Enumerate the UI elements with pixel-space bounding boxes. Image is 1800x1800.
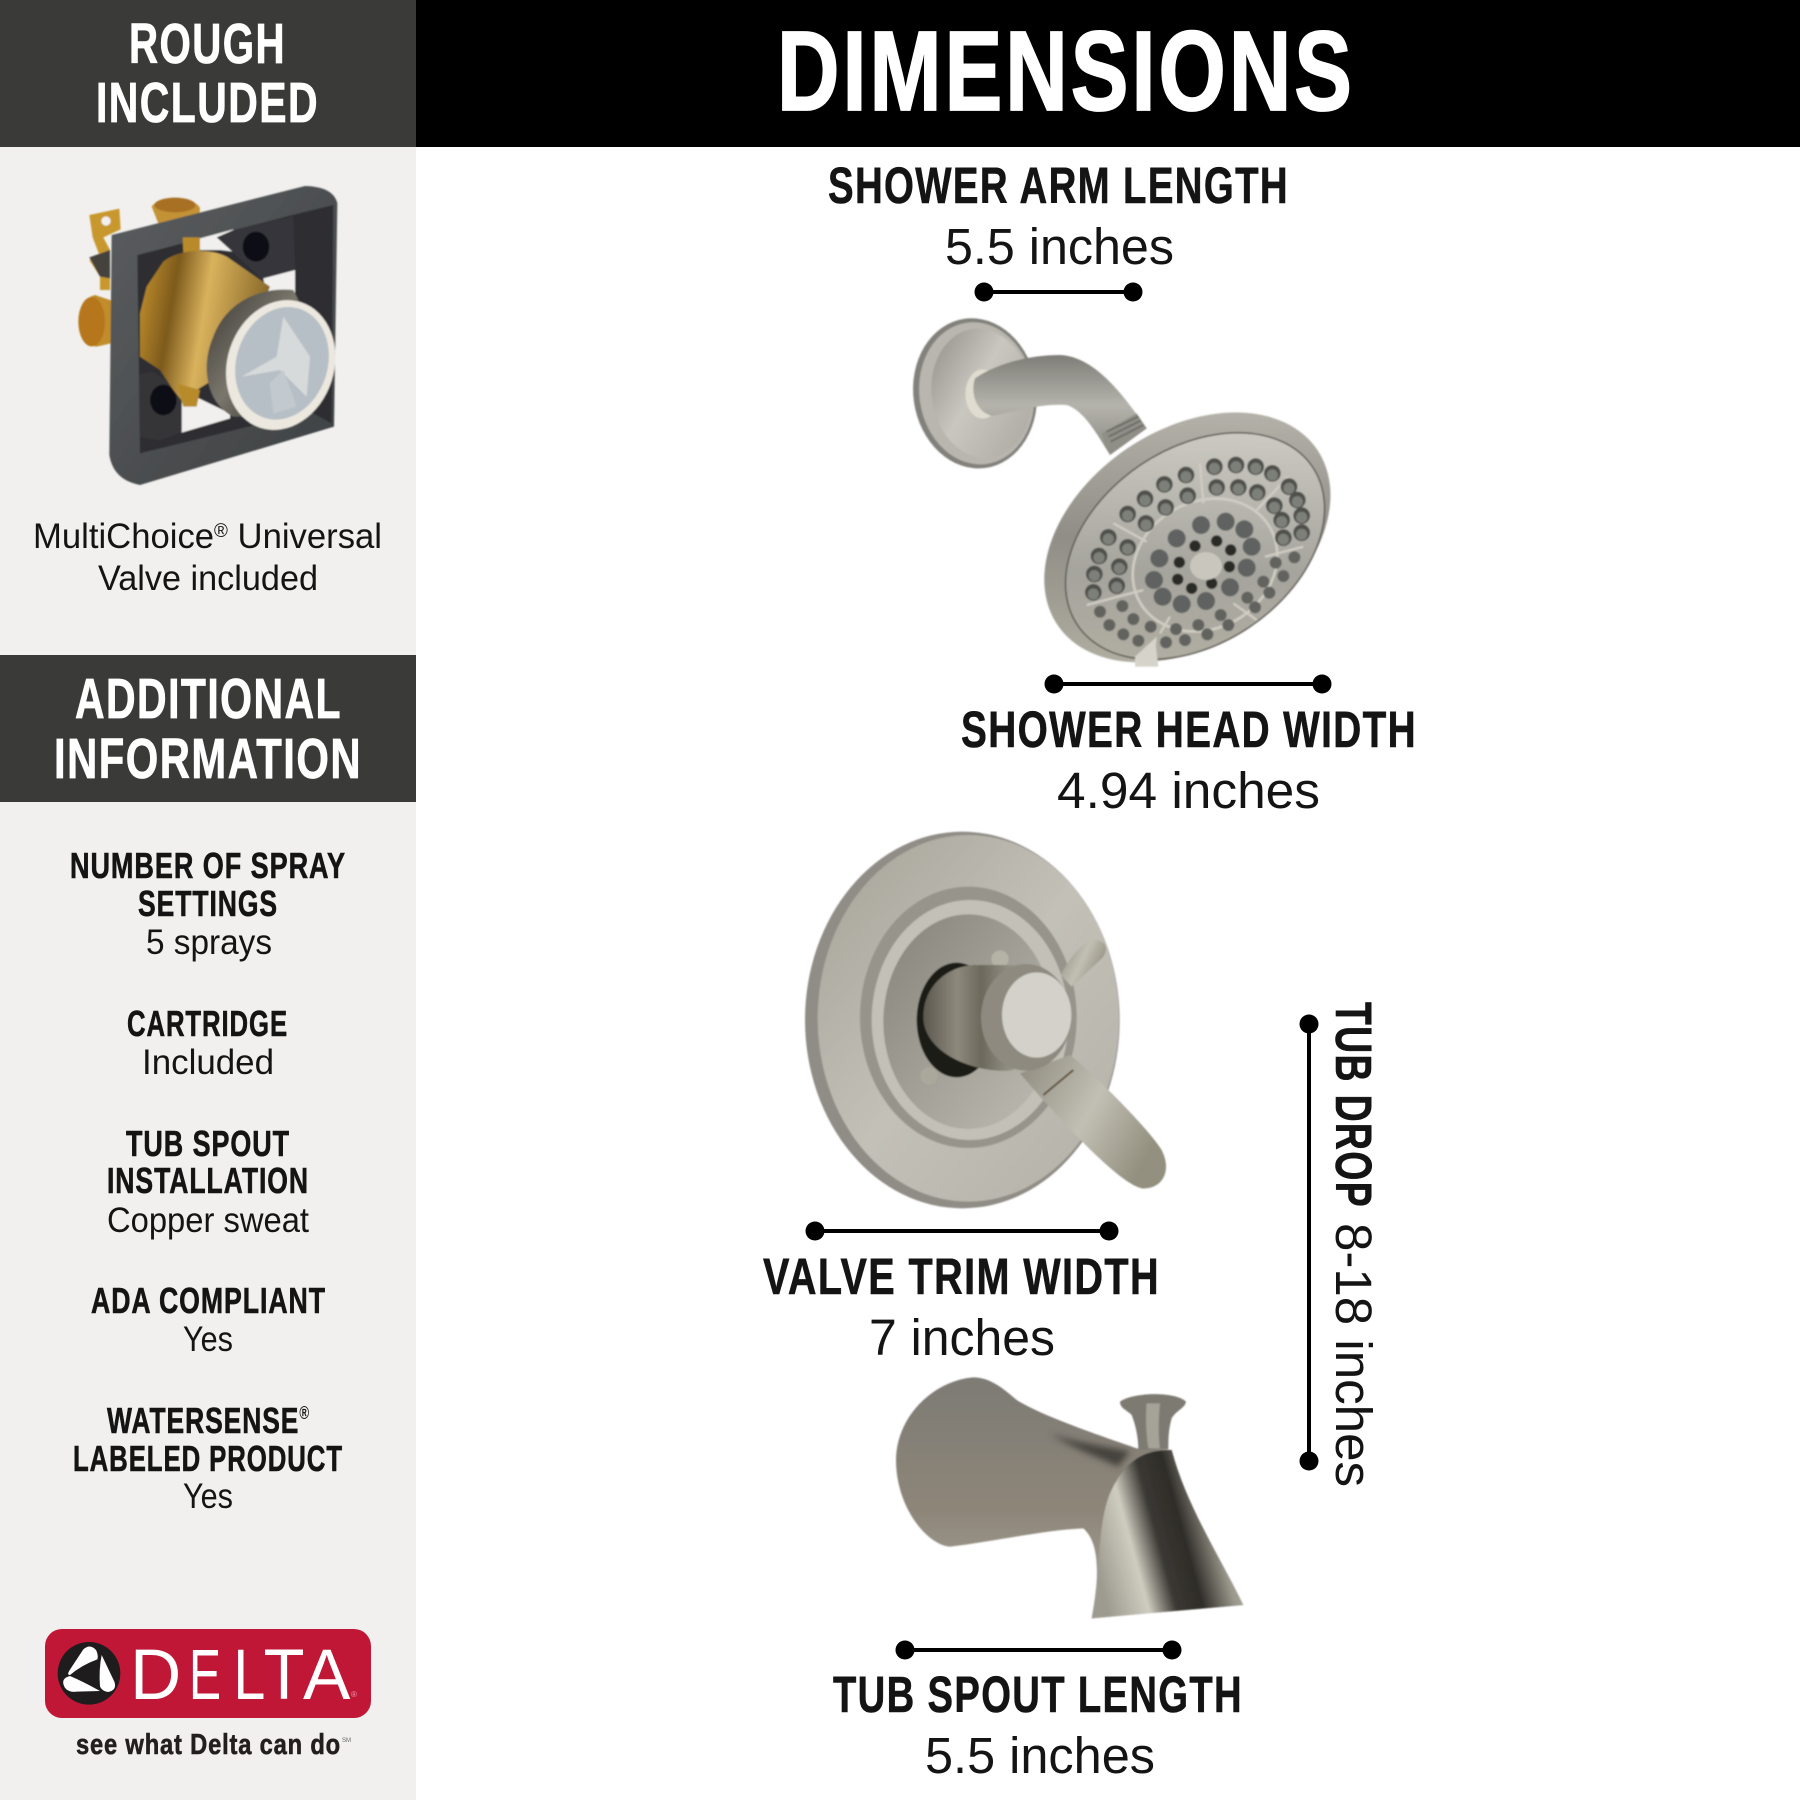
dimension: tub spout length: TUB SPOUT LENGTH: [833, 1666, 1243, 1723]
text: valve caption: Universal: [228, 517, 382, 556]
logo: delta: D: [130, 1636, 181, 1715]
dimension: shower arm length: SHOWER ARM LENGTH: [828, 157, 1289, 214]
logo mark: [58, 1642, 120, 1705]
header: additional information: [0, 655, 416, 802]
logo: delta: SM: [342, 1738, 351, 1744]
header: dimensions title: [416, 0, 1800, 147]
header: rough included: [0, 0, 416, 147]
dimension: shower head width: [961, 674, 1417, 819]
spec: ada compliant: Yes: [183, 1320, 233, 1359]
dimension: tub drop: TUB DROP: [1325, 1002, 1382, 1208]
logo: delta: ®: [351, 1690, 357, 1699]
dimension: tub drop: 8-18 inches: [1325, 1223, 1382, 1487]
image: tub spout: [896, 1377, 1243, 1618]
spec: watersense labeled product: Yes: [183, 1477, 233, 1516]
header: dimensions title: DIMENSIONS: [777, 8, 1355, 134]
spec: number of spray settings: 5 sprays: [146, 923, 272, 962]
dimension: valve trim width: [763, 1222, 1160, 1366]
logo: delta: E: [189, 1636, 221, 1715]
text: valve caption: ®: [214, 521, 228, 542]
dimension: tub spout length: [833, 1640, 1243, 1784]
spec: watersense labeled product: LABELED PRODUCT: [73, 1438, 343, 1479]
header: rough included: INCLUDED: [96, 71, 319, 135]
text: valve caption: [33, 517, 382, 598]
spec: tub spout installation: INSTALLATION: [107, 1160, 309, 1201]
logo: delta: T: [264, 1636, 304, 1715]
dimension: shower head width: 4.94 inches: [1057, 762, 1320, 819]
logo: delta: A: [303, 1636, 351, 1715]
header: additional information: ADDITIONAL: [75, 667, 342, 731]
image: rough-in valve: [78, 186, 352, 485]
header: rough included: ROUGH: [129, 12, 286, 76]
spec: cartridge: Included: [142, 1043, 274, 1082]
logo: delta: see what Delta can do: [76, 1729, 341, 1761]
panel: sidebar background: [0, 0, 416, 1800]
spec: tub spout installation: TUB SPOUT: [126, 1123, 290, 1164]
dimension: valve trim width: VALVE TRIM WIDTH: [763, 1248, 1160, 1305]
spec: watersense labeled product: [73, 1400, 343, 1516]
dimension: valve trim width: 7 inches: [869, 1309, 1055, 1366]
logo: delta: L: [233, 1636, 265, 1715]
spec: number of spray settings: NUMBER OF SPRAY: [70, 845, 346, 886]
dimension: shower arm length: 5.5 inches: [945, 218, 1174, 275]
spec: tub spout installation: Copper sweat: [107, 1201, 309, 1240]
image: valve trim and handle: [805, 832, 1166, 1208]
text: valve caption: MultiChoice: [33, 517, 216, 556]
dimension: shower arm length: [828, 157, 1289, 302]
spec: ada compliant: ADA COMPLIANT: [91, 1280, 326, 1321]
logo: delta: [45, 1629, 371, 1761]
spec: cartridge: CARTRIDGE: [127, 1003, 288, 1044]
spec: number of spray settings: SETTINGS: [138, 883, 278, 924]
spec: tub spout installation: [107, 1123, 309, 1240]
dimension: tub drop: [1300, 1002, 1382, 1487]
dimension: tub spout length: 5.5 inches: [925, 1727, 1155, 1784]
image: shower head and arm: [903, 310, 1377, 714]
dimension: shower head width: SHOWER HEAD WIDTH: [961, 701, 1417, 758]
spec: watersense labeled product: ®: [299, 1403, 310, 1423]
header: additional information: INFORMATION: [54, 727, 362, 791]
spec: number of spray settings: [70, 845, 346, 962]
spec: cartridge: [127, 1003, 288, 1082]
spec: watersense labeled product: WATERSENSE: [107, 1400, 369, 1441]
spec: ada compliant: [91, 1280, 326, 1359]
text: valve caption: Valve included: [98, 559, 318, 598]
